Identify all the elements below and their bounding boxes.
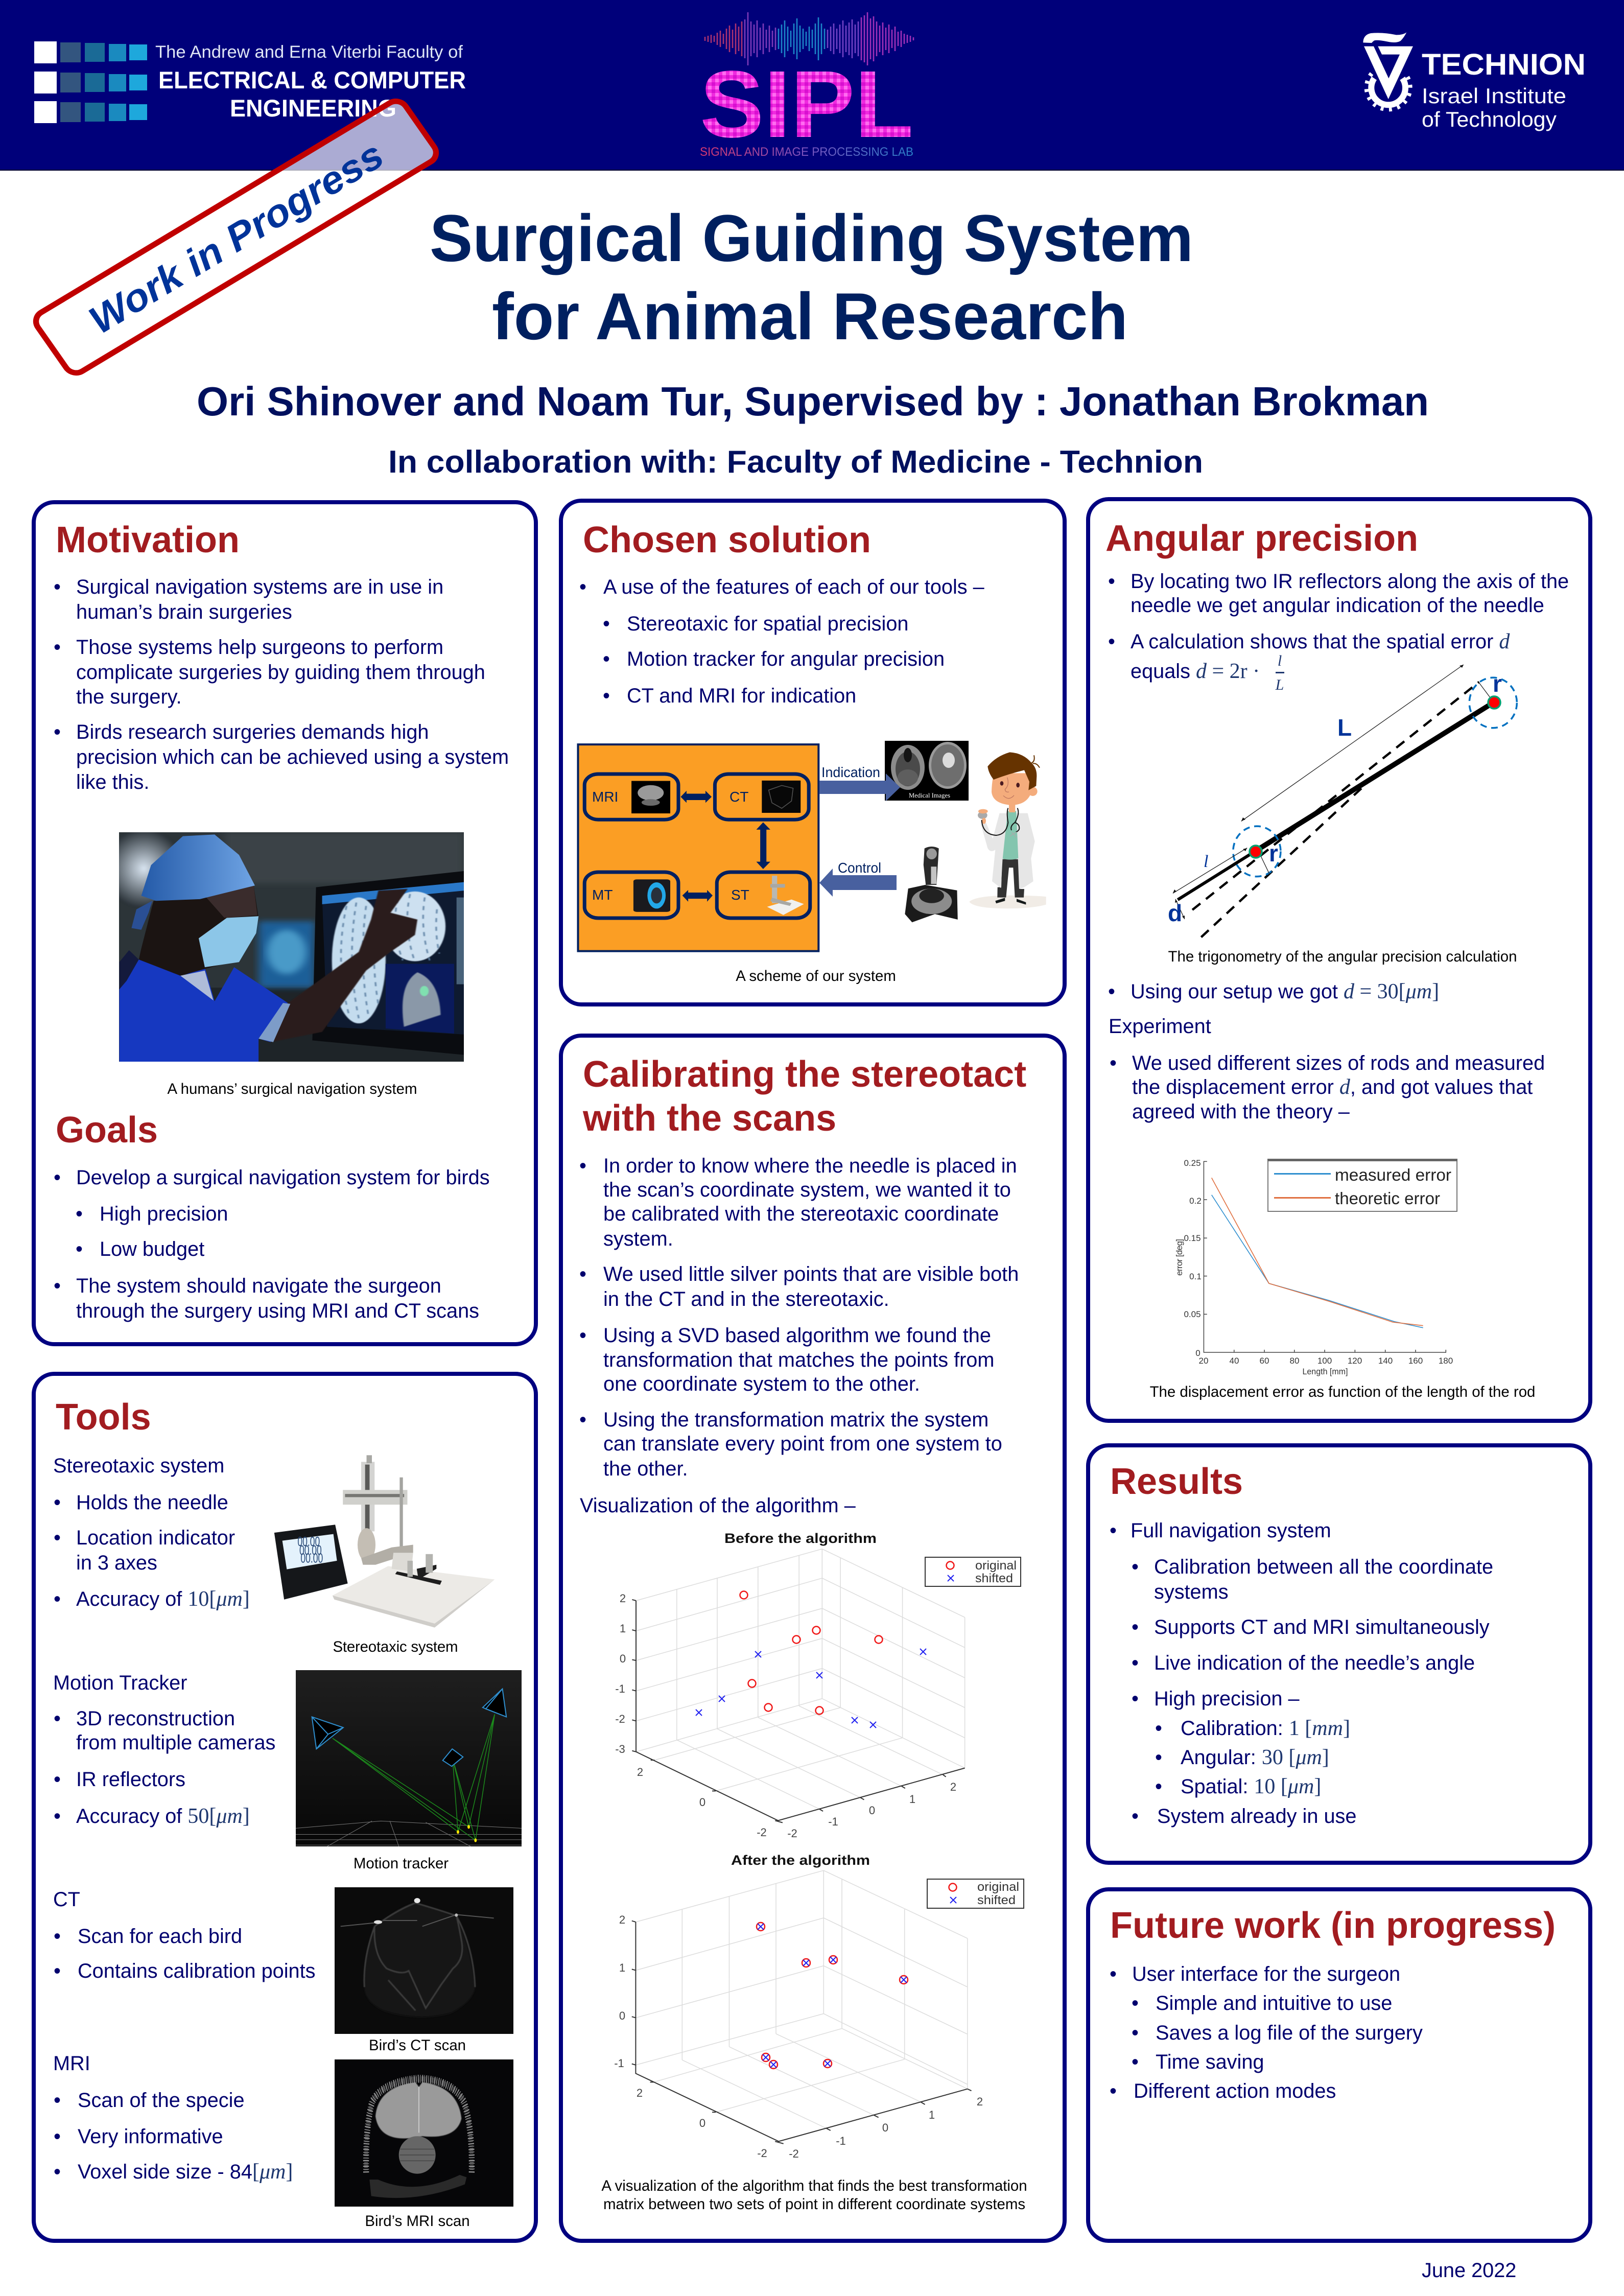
calibration bullets: Visualization of the algorithm – xyxy=(580,1494,856,1517)
future work bullets: Simple and intuitive to use xyxy=(1156,1992,1392,2014)
MRI text: • xyxy=(54,2125,61,2148)
goals bullets: • xyxy=(76,1238,83,1260)
calibration bullets: • xyxy=(579,1324,586,1347)
solution bullets: • xyxy=(603,685,610,707)
motion tracker text: • xyxy=(54,1805,61,1828)
Technion name: of Technology xyxy=(1422,107,1557,131)
setup and experiment text: We used different sizes of rods and measured xyxy=(1132,1052,1545,1074)
calibration bullets: In order to know where the needle is placed in xyxy=(603,1155,1017,1177)
Technion name: TECHNION xyxy=(1422,48,1586,81)
tick labels: 0.25 xyxy=(1184,1158,1201,1168)
MRI text: Very informative xyxy=(78,2125,223,2148)
diagram labels: d xyxy=(1168,900,1182,926)
faculty logo squares xyxy=(34,41,147,123)
goals bullets: • xyxy=(54,1166,61,1189)
MRI text: Scan of the specie xyxy=(78,2089,245,2112)
calibration bullets xyxy=(579,1155,1019,1517)
solution bullets: Motion tracker for angular precision xyxy=(627,648,945,670)
angular bullets: A calculation shows that the spatial error d xyxy=(1131,630,1510,653)
axis labels: 2 xyxy=(619,1913,625,1926)
motion tracker text: from multiple cameras xyxy=(76,1731,275,1754)
faculty name: The Andrew and Erna Viterbi Faculty of xyxy=(155,42,463,62)
panel: chosen solution xyxy=(561,501,1065,1004)
tick labels: 0 xyxy=(1195,1348,1201,1358)
caption: displacement: The displacement error as function of the length of the rod xyxy=(1150,1384,1535,1400)
future work bullets: Saves a log file of the surgery xyxy=(1156,2022,1423,2044)
tick labels xyxy=(1184,1158,1453,1366)
motion tracker text: 3D reconstruction xyxy=(76,1707,235,1730)
diagram labels: L xyxy=(1337,714,1352,741)
box labels: MRI xyxy=(592,789,618,805)
setup and experiment text: Using our setup we got d = 30[μm] xyxy=(1131,980,1439,1003)
caption: trigonometry: The trigonometry of the angular precision calculation xyxy=(1168,948,1517,965)
axis labels: -2 xyxy=(757,1826,767,1839)
results bullets: Spatial: 10 [μm] xyxy=(1181,1775,1321,1798)
axis labels: 1 xyxy=(620,1622,626,1635)
panel: results xyxy=(1088,1445,1590,1863)
image: motion tracker capture xyxy=(296,1670,522,1846)
title xyxy=(430,201,1193,354)
future work bullets: • xyxy=(1110,2080,1117,2102)
faculty name xyxy=(155,42,466,122)
faculty name: ENGINEERING xyxy=(230,95,396,122)
angular bullets: l xyxy=(1278,652,1282,669)
work in progress banner: Work in Progress xyxy=(82,133,391,342)
y axis title: error [deg] xyxy=(1174,1239,1184,1276)
results bullets: Calibration: 1 [mm] xyxy=(1181,1717,1350,1740)
title: Surgical Guiding System xyxy=(430,201,1193,275)
axis labels: 0 xyxy=(869,1804,875,1817)
tick labels: 100 xyxy=(1317,1356,1332,1366)
motivation bullets: complicate surgeries by guiding them through xyxy=(76,661,485,684)
axis labels: 1 xyxy=(929,2108,935,2121)
collaboration line: In collaboration with: Faculty of Medicine - Technion xyxy=(388,444,1203,480)
CT text: CT xyxy=(53,1888,80,1911)
chart title: Before the algorithm xyxy=(724,1531,877,1546)
axis labels: -1 xyxy=(828,1815,838,1828)
angular bullets: L xyxy=(1275,676,1284,693)
calibration bullets: can translate every point from one system to xyxy=(603,1433,1002,1455)
axis labels: -2 xyxy=(789,2147,799,2160)
results bullets: • xyxy=(1155,1775,1162,1798)
axis labels: -2 xyxy=(787,1827,797,1840)
caption: algorithm visualization: matrix between two sets of point in different coordinate systems xyxy=(603,2196,1025,2213)
calibration bullets: transformation that matches the points from xyxy=(603,1349,994,1371)
stereotaxic text: Accuracy of 10[μm] xyxy=(76,1587,250,1611)
goals bullets: High precision xyxy=(100,1203,228,1225)
solution bullets: • xyxy=(579,576,586,598)
results bullets: System already in use xyxy=(1157,1805,1356,1828)
caption: navigation system: A humans’ surgical navigation system xyxy=(168,1081,417,1097)
goals bullets: Develop a surgical navigation system for birds xyxy=(76,1166,490,1189)
heading: tools: Tools xyxy=(56,1397,151,1438)
stereotaxic text: in 3 axes xyxy=(76,1552,157,1574)
header band xyxy=(0,0,1624,171)
stereotaxic text: Location indicator xyxy=(76,1527,235,1549)
results bullets: Supports CT and MRI simultaneously xyxy=(1154,1616,1490,1638)
panel: angular precision xyxy=(1088,499,1590,1421)
image: bird CT scan xyxy=(335,1887,513,2034)
box labels: MT xyxy=(592,887,613,903)
MRI text: Voxel side size - 84[μm] xyxy=(78,2160,293,2184)
stereotaxic text: • xyxy=(54,1588,61,1610)
axis labels: 1 xyxy=(619,1961,625,1974)
axis labels: 2 xyxy=(620,1592,626,1605)
setup and experiment text xyxy=(1108,980,1545,1123)
arrow: control xyxy=(819,869,897,897)
diagram labels: l xyxy=(1204,852,1208,871)
results bullets: • xyxy=(1132,1652,1139,1674)
future work bullets: • xyxy=(1132,2051,1139,2073)
axis labels: -1 xyxy=(836,2135,846,2147)
axis labels: -1 xyxy=(615,1682,625,1695)
SIPL wordmark: SIPL xyxy=(700,52,913,157)
MRI text xyxy=(53,2052,293,2184)
stereotaxic text: • xyxy=(54,1491,61,1514)
chart: after the algorithm xyxy=(614,1853,1024,2160)
icon: doctor xyxy=(969,752,1046,908)
future work bullets: Different action modes xyxy=(1134,2080,1336,2102)
motion tracker text: IR reflectors xyxy=(76,1768,185,1791)
motivation bullets: Those systems help surgeons to perform xyxy=(76,636,443,659)
tick labels: 140 xyxy=(1378,1356,1393,1366)
photo: surgeon at navigation screen xyxy=(119,832,464,1062)
motivation bullets: • xyxy=(54,721,61,743)
results bullets: Angular: 30 [μm] xyxy=(1181,1746,1329,1769)
results bullets xyxy=(1110,1519,1493,1828)
motivation bullets: Surgical navigation systems are in use in xyxy=(76,576,443,598)
axis labels: 0 xyxy=(699,1796,705,1809)
calibration bullets: be calibrated with the stereotaxic coordinate xyxy=(603,1203,999,1225)
legend: theoretic error xyxy=(1335,1189,1440,1208)
angular bullets: • xyxy=(1108,630,1115,653)
motivation bullets: Birds research surgeries demands high xyxy=(76,721,429,743)
calibration bullets: Using the transformation matrix the system xyxy=(603,1409,988,1431)
caption: scheme: A scheme of our system xyxy=(736,968,896,985)
legend xyxy=(925,1557,1021,1586)
arrow: indication xyxy=(819,774,900,801)
box labels: CT xyxy=(729,789,748,805)
tick labels: 20 xyxy=(1199,1356,1208,1366)
solution bullets: • xyxy=(603,613,610,635)
axis labels: 0 xyxy=(882,2121,888,2134)
legend xyxy=(1267,1159,1457,1211)
legend: original xyxy=(975,1559,1017,1573)
photo: stereotaxic system: 00.00 xyxy=(300,1551,323,1565)
work in progress banner xyxy=(32,95,440,380)
stereotaxic text: Holds the needle xyxy=(76,1491,228,1514)
x axis title: Length [mm] xyxy=(1303,1367,1348,1376)
photo: stereotaxic system xyxy=(274,1455,495,1628)
calibration bullets: one coordinate system to the other. xyxy=(603,1373,920,1395)
motivation bullets: precision which can be achieved using a system xyxy=(76,746,509,768)
results bullets: systems xyxy=(1154,1581,1229,1603)
CT text: Contains calibration points xyxy=(78,1960,316,1982)
motion tracker text: • xyxy=(54,1768,61,1791)
legend xyxy=(927,1879,1024,1908)
panel: motivation and goals xyxy=(34,502,536,1344)
caption: motion tracker: Motion tracker xyxy=(354,1855,449,1872)
caption: algorithm visualization: A visualization of the algorithm that finds the best transformation xyxy=(601,2177,1027,2194)
box labels: ST xyxy=(731,887,749,903)
legend: measured error xyxy=(1335,1165,1451,1184)
panel: future work xyxy=(1088,1889,1590,2241)
CT text: • xyxy=(54,1925,61,1948)
tick labels: 80 xyxy=(1290,1356,1299,1366)
image: bird MRI scan xyxy=(335,2059,513,2207)
axis labels: -2 xyxy=(757,2147,767,2160)
heading: angular precision: Angular precision xyxy=(1105,518,1418,559)
calibration bullets: We used little silver points that are visible both xyxy=(603,1263,1019,1285)
CT text xyxy=(53,1888,316,1982)
diagram labels: r xyxy=(1269,840,1278,866)
results bullets: Full navigation system xyxy=(1131,1519,1331,1542)
motivation bullets: like this. xyxy=(76,771,149,793)
results bullets: • xyxy=(1132,1805,1139,1828)
image: medical images: Medical Images xyxy=(909,791,950,799)
stereotaxic text: Stereotaxic system xyxy=(53,1455,224,1477)
motivation bullets: human’s brain surgeries xyxy=(76,601,292,623)
heading: calibrating: Calibrating the stereotact xyxy=(583,1054,1026,1095)
MRI text: • xyxy=(54,2161,61,2183)
box labels xyxy=(592,789,749,903)
motion tracker text: Motion Tracker xyxy=(53,1672,187,1694)
axis labels: 1 xyxy=(909,1793,915,1806)
setup and experiment text: • xyxy=(1110,1052,1117,1074)
title: for Animal Research xyxy=(492,279,1128,354)
angular bullets xyxy=(1108,570,1569,693)
heading: calibrating xyxy=(582,1054,1026,1139)
motion tracker text: • xyxy=(54,1707,61,1730)
heading: chosen solution: Chosen solution xyxy=(583,520,871,560)
angular bullets: equals d = 2r · xyxy=(1131,660,1260,683)
axis labels: 2 xyxy=(977,2095,983,2108)
authors: Ori Shinover and Noam Tur, Supervised by : Jonathan Brokman xyxy=(197,379,1429,424)
heading: future work: Future work (in progress) xyxy=(1110,1905,1556,1946)
caption: algorithm visualization xyxy=(601,2177,1027,2213)
setup and experiment text: Experiment xyxy=(1109,1015,1211,1038)
system scheme diagram xyxy=(578,741,1046,951)
goals bullets: • xyxy=(54,1275,61,1297)
motion tracker text: Accuracy of 50[μm] xyxy=(76,1805,250,1828)
axis labels xyxy=(614,1913,983,2160)
faculty name: ELECTRICAL & COMPUTER xyxy=(158,66,466,93)
results bullets: • xyxy=(1155,1746,1162,1769)
future work bullets xyxy=(1110,1963,1423,2102)
caption: bird CT: Bird’s CT scan xyxy=(369,2037,466,2054)
tick labels: 60 xyxy=(1260,1356,1269,1366)
legend: shifted xyxy=(975,1572,1013,1585)
axis labels: 2 xyxy=(950,1780,956,1793)
angular bullets: By locating two IR reflectors along the axis of the xyxy=(1131,570,1569,593)
data: shifted points xyxy=(696,1649,926,1728)
goals bullets xyxy=(54,1166,490,1322)
calibration bullets: in the CT and in the stereotaxic. xyxy=(603,1288,889,1310)
tick labels: 0.15 xyxy=(1184,1233,1201,1243)
heading: results: Results xyxy=(1110,1461,1243,1502)
axis labels: 0 xyxy=(699,2117,705,2129)
axis labels: 2 xyxy=(637,2087,643,2099)
tick labels: 0.05 xyxy=(1184,1309,1201,1319)
calibration bullets: system. xyxy=(603,1228,673,1250)
3D axes and grid xyxy=(632,1870,972,2144)
results bullets: High precision – xyxy=(1154,1688,1300,1710)
calibration bullets: the scan’s coordinate system, we wanted it to xyxy=(603,1179,1011,1201)
motion tracker text xyxy=(53,1672,275,1828)
axis labels: -3 xyxy=(615,1743,625,1755)
MRI text: • xyxy=(54,2089,61,2112)
MRI text: MRI xyxy=(53,2052,90,2075)
image: medical images xyxy=(885,741,969,801)
diagram labels: r xyxy=(1493,670,1502,697)
date: June 2022 xyxy=(1422,2259,1516,2282)
diagram labels xyxy=(1168,670,1502,926)
motivation bullets: • xyxy=(54,636,61,659)
setup and experiment text: agreed with the theory – xyxy=(1132,1100,1350,1123)
heading: motivation: Motivation xyxy=(56,520,240,560)
diagram: needle trigonometry xyxy=(1168,665,1517,937)
panel: tools xyxy=(34,1374,536,2241)
goals bullets: • xyxy=(76,1203,83,1225)
motivation bullets xyxy=(54,576,509,793)
goals bullets: through the surgery using MRI and CT scans xyxy=(76,1300,479,1322)
tick labels: 40 xyxy=(1230,1356,1239,1366)
SIPL waveform xyxy=(705,12,913,65)
heading: calibrating: with the scans xyxy=(582,1098,836,1139)
results bullets: • xyxy=(1132,1688,1139,1710)
goals bullets: The system should navigate the surgeon xyxy=(76,1275,441,1297)
chart title: After the algorithm xyxy=(731,1853,870,1868)
label: indication: Indication xyxy=(821,764,880,780)
goals bullets: Low budget xyxy=(100,1238,204,1260)
Technion name xyxy=(1422,48,1586,131)
motivation bullets: • xyxy=(54,576,61,598)
orange system block xyxy=(578,744,818,951)
axis labels: -2 xyxy=(615,1713,625,1725)
results bullets: Calibration between all the coordinate xyxy=(1154,1556,1493,1578)
tick labels: 160 xyxy=(1408,1356,1423,1366)
results bullets: Live indication of the needle’s angle xyxy=(1154,1652,1475,1674)
data: original points xyxy=(740,1591,883,1715)
stereotaxic text: • xyxy=(54,1527,61,1549)
calibration bullets: • xyxy=(579,1155,586,1177)
solution bullets: A use of the features of each of our tools – xyxy=(603,576,985,598)
tick labels: 180 xyxy=(1439,1356,1453,1366)
axis labels: 2 xyxy=(637,1766,643,1778)
future work bullets: • xyxy=(1132,2022,1139,2044)
solution bullets: • xyxy=(603,648,610,670)
icon: Technion emblem xyxy=(1363,32,1413,109)
axis labels: 0 xyxy=(620,1652,626,1665)
tick labels: 0.2 xyxy=(1189,1196,1202,1206)
results bullets: • xyxy=(1132,1616,1139,1638)
axis labels xyxy=(615,1592,956,1840)
angular bullets: needle we get angular indication of the needle xyxy=(1131,594,1544,617)
label: control: Control xyxy=(838,860,881,876)
results bullets: • xyxy=(1155,1717,1162,1740)
solution bullets: Stereotaxic for spatial precision xyxy=(627,613,908,635)
future work bullets: Time saving xyxy=(1156,2051,1264,2073)
axis labels: -1 xyxy=(614,2057,624,2070)
results bullets: • xyxy=(1132,1556,1139,1578)
calibration bullets: Using a SVD based algorithm we found the xyxy=(603,1324,991,1347)
chart: before the algorithm xyxy=(615,1531,1021,1840)
axis labels: 0 xyxy=(619,2009,625,2022)
calibration bullets: the other. xyxy=(603,1458,688,1480)
setup and experiment text: • xyxy=(1108,980,1115,1003)
photo: stereotaxic system: 00.00 xyxy=(297,1534,320,1549)
chart: displacement error vs length xyxy=(1174,1158,1457,1376)
future work bullets: • xyxy=(1110,1963,1117,1985)
SIPL subtitle: SIGNAL AND IMAGE PROCESSING LAB xyxy=(700,145,913,159)
calibration bullets: • xyxy=(579,1409,586,1431)
legend: original xyxy=(977,1880,1019,1894)
stereotaxic text xyxy=(53,1455,250,1611)
solution bullets xyxy=(579,576,985,707)
data: overlapping points xyxy=(757,1923,908,2069)
CT text: Scan for each bird xyxy=(78,1925,242,1948)
solution bullets: CT and MRI for indication xyxy=(627,685,856,707)
angular bullets: • xyxy=(1108,570,1115,593)
3D axes and grid xyxy=(632,1549,965,1823)
motivation bullets: the surgery. xyxy=(76,686,182,708)
panel: calibrating the stereotact xyxy=(561,1036,1065,2241)
photo: stereotaxic system: 00.00 xyxy=(299,1542,322,1558)
caption: bird MRI: Bird’s MRI scan xyxy=(365,2213,470,2230)
heading: goals: Goals xyxy=(56,1110,158,1151)
results bullets: • xyxy=(1110,1519,1117,1542)
caption: stereotaxic: Stereotaxic system xyxy=(333,1638,458,1655)
Technion name: Israel Institute xyxy=(1422,84,1566,108)
CT text: • xyxy=(54,1960,61,1982)
icon: joystick xyxy=(905,847,958,922)
calibration bullets: • xyxy=(579,1263,586,1285)
tick labels: 0.1 xyxy=(1189,1272,1202,1281)
legend: shifted xyxy=(977,1893,1016,1907)
tick labels: 120 xyxy=(1348,1356,1362,1366)
setup and experiment text: the displacement error d, and got values that xyxy=(1132,1075,1533,1099)
future work bullets: • xyxy=(1132,1992,1139,2014)
future work bullets: User interface for the surgeon xyxy=(1132,1963,1400,1985)
